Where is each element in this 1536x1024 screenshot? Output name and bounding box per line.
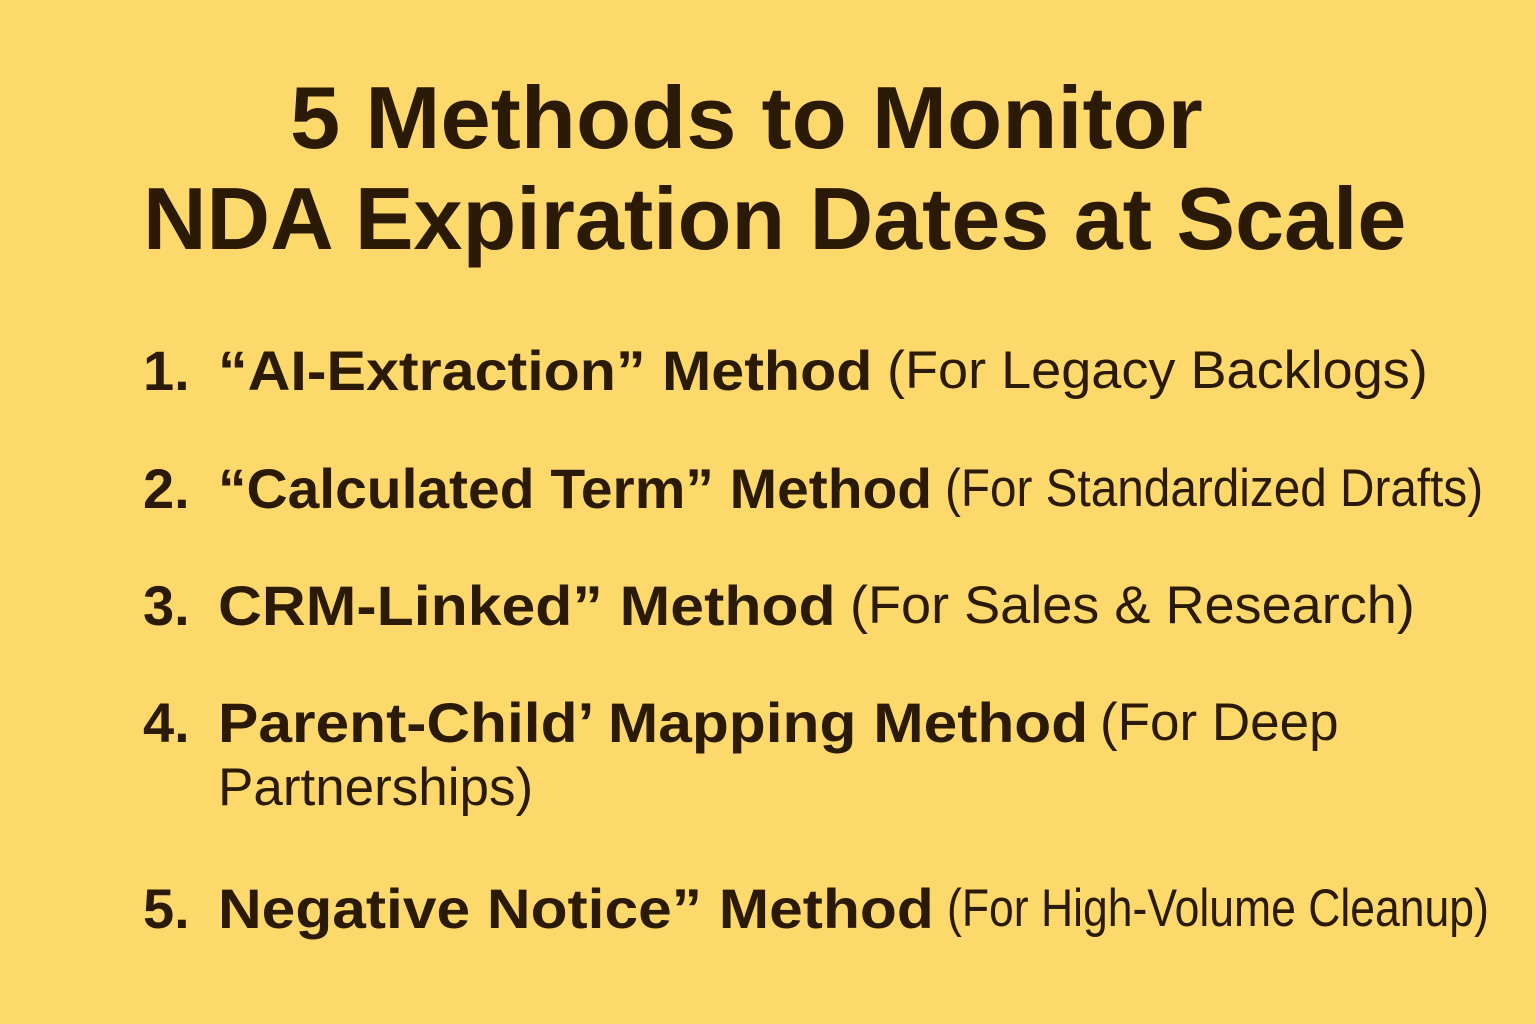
item 1 (143, 339, 1428, 402)
item 3 (143, 574, 1415, 637)
item 1: 1. (143, 339, 190, 402)
title (143, 68, 1406, 268)
item 4: Parent-Child’ Mapping Method (218, 691, 1088, 754)
item 2: “Calculated Term” Method (218, 457, 932, 520)
item 2 (143, 457, 1483, 520)
item 1: (For Legacy Backlogs) (887, 341, 1428, 400)
item 1: “AI-Extraction” Method (218, 339, 872, 402)
item 2: 2. (143, 457, 190, 520)
item 4: 4. (143, 691, 190, 754)
item 3: CRM-Linked” Method (218, 574, 836, 637)
item 5: 5. (143, 877, 190, 940)
item 5 (143, 877, 1489, 940)
item 2: (For Standardized Drafts) (945, 459, 1483, 518)
item 4: (For Deep (1100, 693, 1339, 752)
item 4 (143, 691, 1339, 817)
item 5: Negative Notice” Method (218, 877, 934, 940)
item 4: Partnerships) (218, 758, 533, 817)
title: 5 Methods to Monitor (290, 68, 1203, 167)
title: NDA Expiration Dates at Scale (143, 169, 1406, 268)
item 5: (For High-Volume Cleanup) (947, 879, 1489, 938)
item 3: (For Sales & Research) (850, 576, 1415, 635)
item 3: 3. (143, 574, 190, 637)
